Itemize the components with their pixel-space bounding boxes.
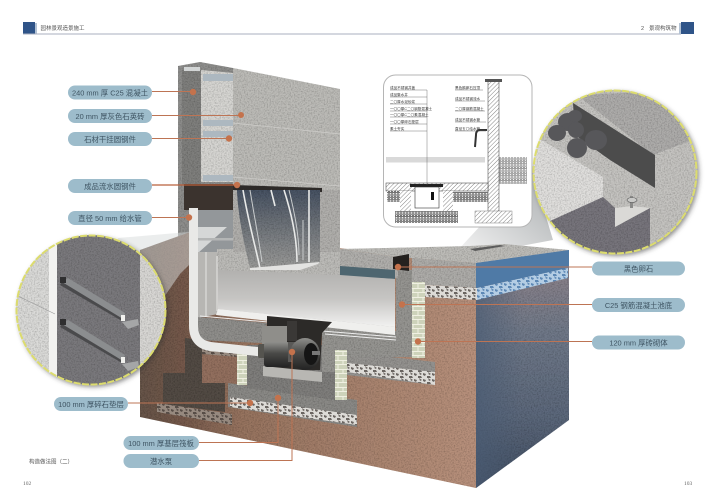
wall: cut section and stone face xyxy=(178,62,340,252)
drawing notes xyxy=(390,85,484,131)
concrete right of pit xyxy=(322,270,412,372)
caption: 构造做法图（二） xyxy=(29,458,73,466)
right pit corner: black pebble slot xyxy=(393,245,505,271)
right face: blue tinted soil xyxy=(476,250,569,488)
header: right page xyxy=(641,22,694,34)
bracket lower xyxy=(60,319,139,371)
zoom circle: pebble edge xyxy=(530,90,698,260)
label: black pebble: 黑色卵石 xyxy=(624,264,653,273)
label: pump xyxy=(124,349,295,468)
label: supply pipe: 直径 50 mm 给水管 xyxy=(78,214,142,223)
label: 20 mm quartz tile: 20 mm 厚灰色石英砖 xyxy=(76,112,145,121)
pit opening xyxy=(267,316,332,370)
label: C25 concrete xyxy=(399,298,685,312)
label: pump: 潜水泵 xyxy=(150,457,173,466)
label: brick masonry: 120 mm 厚砖砌体 xyxy=(609,338,668,347)
floor xyxy=(386,183,488,191)
drawing notes: 成品集水井 xyxy=(390,92,408,97)
label: 240 mm concrete xyxy=(68,86,196,100)
basin interior xyxy=(198,249,398,370)
front face: soil xyxy=(140,232,476,488)
bricks xyxy=(412,282,425,358)
page number left: 102 xyxy=(23,481,32,487)
label: brick masonry xyxy=(415,336,685,350)
gravel bands xyxy=(477,268,568,300)
callout wedge: detail drawing xyxy=(458,170,553,250)
drawing notes: 二〇厚水泥砂浆 xyxy=(390,99,416,104)
label: outlet steel xyxy=(68,179,240,193)
outlet bar xyxy=(233,185,322,192)
concrete left of pit xyxy=(198,317,267,343)
label: C25 concrete: C25 钢筋混凝土池底 xyxy=(605,301,673,310)
header: left page xyxy=(23,22,85,34)
drawing notes: 直径五〇给水管 xyxy=(455,126,481,131)
drawing notes: 成品不锈钢水管 xyxy=(455,117,481,122)
pit concrete xyxy=(247,345,335,400)
right slab and gravel xyxy=(347,352,435,385)
bolt xyxy=(615,196,650,227)
pump xyxy=(258,321,322,382)
dark column and block xyxy=(163,338,225,412)
lower wall section glass area xyxy=(198,210,233,253)
label: raft slab: 100 mm 厚基层筏板 xyxy=(128,439,194,448)
drawing notes: 成品不锈钢流水 xyxy=(455,96,481,101)
ground band xyxy=(386,157,485,162)
header: right page: 2 xyxy=(641,26,644,32)
brown infill xyxy=(202,355,238,383)
drawing notes: 一〇〇厚C二〇钢筋混凝土 xyxy=(390,106,433,111)
drawing notes: 二〇厚钢筋混凝土 xyxy=(455,106,484,111)
leader xyxy=(390,90,427,185)
stone face xyxy=(233,68,340,252)
label: gravel: 100 mm 厚碎石垫层 xyxy=(58,400,124,409)
label: gravel xyxy=(54,397,253,411)
label: black pebble xyxy=(395,262,685,276)
label: outlet steel: 成品流水圆钢件 xyxy=(84,182,136,191)
callout wedge: left zoom xyxy=(118,226,228,332)
dark gravel band xyxy=(157,403,232,425)
wall lower stone and water outlet xyxy=(233,185,340,270)
pipe xyxy=(475,130,487,147)
header: right page: 景观构筑物 xyxy=(649,24,677,32)
label: supply pipe xyxy=(68,211,192,225)
bracket upper xyxy=(60,277,139,329)
pit xyxy=(410,184,443,187)
drawing notes: 成品不锈钢井盖 xyxy=(390,85,416,90)
pebbles xyxy=(548,110,607,158)
white supply pipe xyxy=(194,208,262,352)
label: stone hanging steel: 石材干挂圆钢件 xyxy=(84,135,136,144)
top stone surface xyxy=(340,244,569,263)
detail drawing panel xyxy=(384,75,532,227)
water lip xyxy=(250,262,320,270)
header: left page: 园林景观造景施工 xyxy=(40,24,85,32)
label: stone hanging steel xyxy=(68,132,232,146)
label: raft slab xyxy=(124,395,281,450)
header rule xyxy=(23,34,681,35)
drawing notes: 一〇〇厚C二〇素混凝土 xyxy=(390,112,429,117)
soil block with layers xyxy=(140,232,569,488)
page number right: 103 xyxy=(684,481,692,487)
label: 240 mm concrete: 240 mm 厚 C25 混凝土 xyxy=(72,88,148,97)
drawing notes: 素土夯实 xyxy=(390,126,405,131)
wall hatch xyxy=(488,80,499,212)
label: 20 mm quartz tile xyxy=(68,109,244,123)
leader lines and pills: callouts xyxy=(54,86,685,468)
zoom circle: stone cladding brackets xyxy=(16,235,166,385)
waterfall xyxy=(237,190,320,268)
drawing notes: 一〇〇厚碎石垫层 xyxy=(390,119,419,124)
lower slab and gravel xyxy=(228,383,357,427)
wall section xyxy=(178,62,233,240)
drawing notes: 黑色鹅卵石压顶 xyxy=(455,85,481,90)
